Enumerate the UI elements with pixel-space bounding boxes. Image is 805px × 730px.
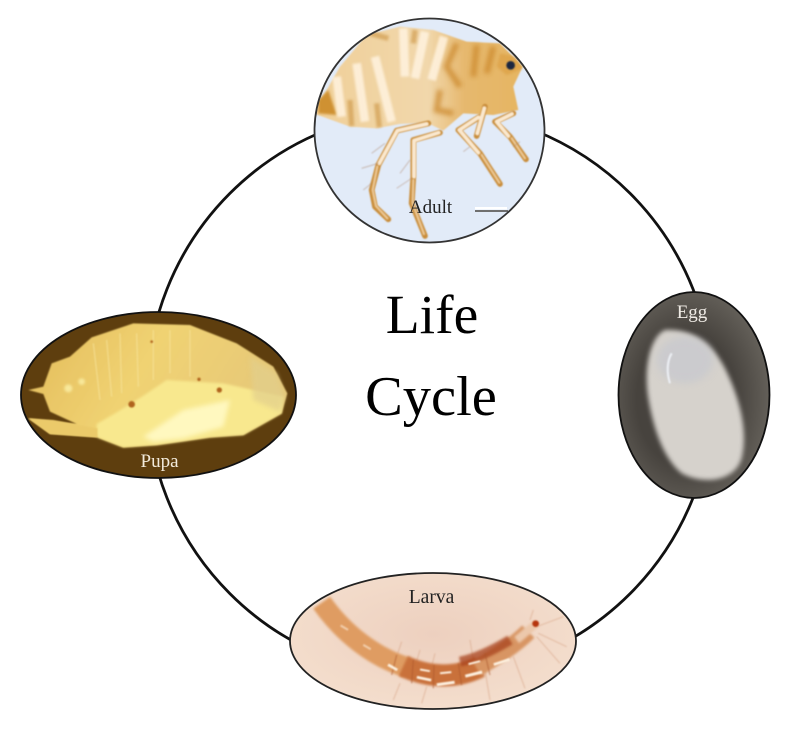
icon: egg [647,330,744,480]
panel: adult stage [310,15,550,247]
label: egg: Egg [677,302,708,323]
title: Life [386,285,478,346]
scale bar [475,207,508,212]
label: pupa: Pupa [140,451,179,472]
label: larva: Larva [409,587,455,608]
cycle ring [147,110,713,676]
icon: pupa [28,323,287,447]
label: adult: Adult [409,197,453,218]
panel: larva stage [290,573,576,709]
icon: larva [322,603,567,703]
title: Cycle [365,366,497,428]
title [365,285,497,428]
panel: egg stage [618,292,770,498]
icon: adult flea [313,27,526,236]
panel: pupa stage [21,312,296,478]
